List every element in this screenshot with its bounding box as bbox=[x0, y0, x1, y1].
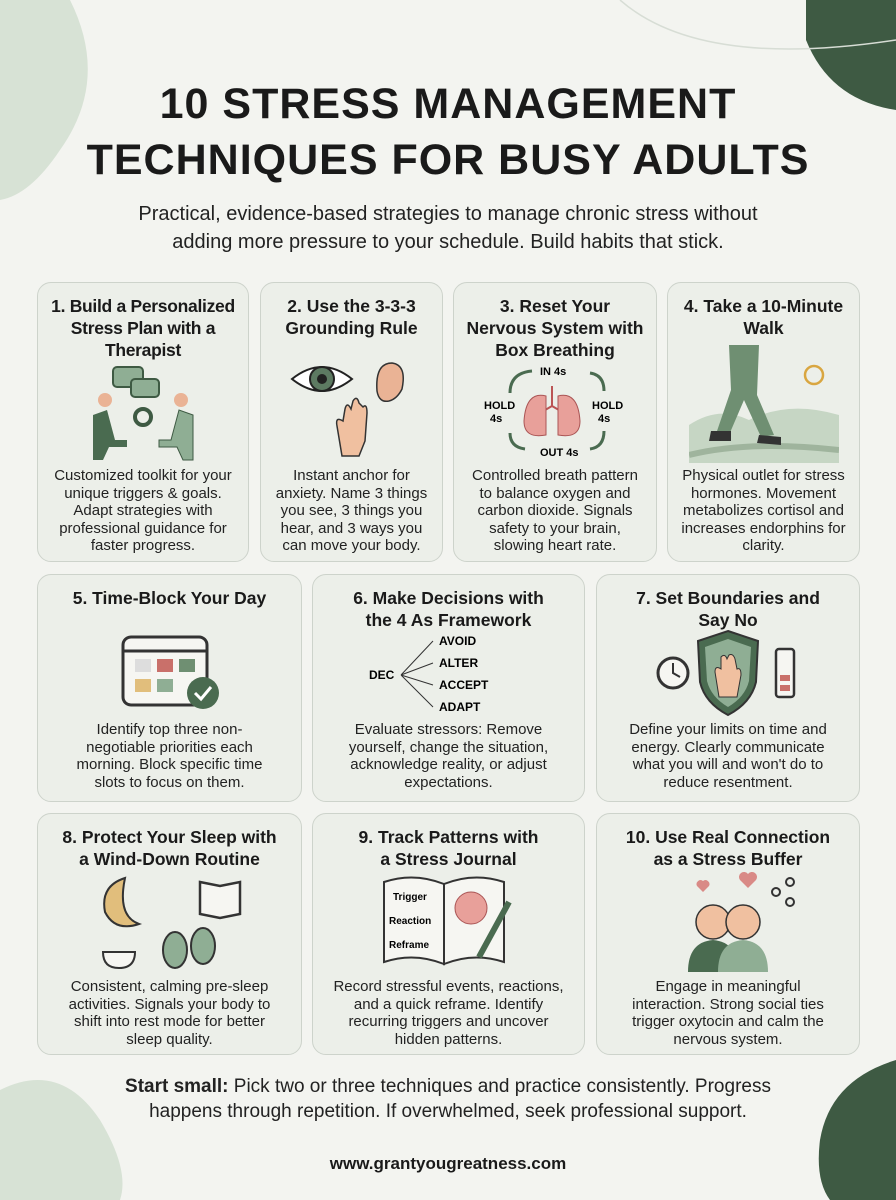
card 5 bbox=[37, 574, 302, 802]
subtitle: adding more pressure to your schedule. Build habits that stick. bbox=[172, 231, 724, 253]
card 3 bbox=[453, 282, 657, 562]
card 6 bbox=[312, 574, 585, 802]
icon: therapy bbox=[93, 366, 194, 460]
card 2: 2. Use the 3-3-3 Grounding Rule bbox=[285, 296, 418, 338]
card 9: 9. Track Patterns with a Stress Journal bbox=[359, 827, 538, 869]
icon: decision tree bbox=[368, 634, 489, 714]
subtitle: Practical, evidence-based strategies to manage chronic stress without bbox=[138, 203, 758, 225]
icon: calendar bbox=[122, 636, 219, 709]
card 4: Physical outlet for stress hormones. Movement metabolizes cortisol and increases endorphins for clarity. bbox=[681, 467, 846, 554]
footer note: Start small: Pick two or three techniques and practice consistently. Progress bbox=[125, 1076, 771, 1097]
url: www.grantyougreatness.com bbox=[330, 1154, 566, 1173]
card 9: Record stressful events, reactions, and a quick reframe. Identify recurring triggers and uncover hidden patterns. bbox=[333, 978, 564, 1048]
card 3: 3. Reset Your Nervous System with Box Breathing bbox=[466, 296, 644, 360]
icon: lungs box breathing: 4s bbox=[598, 413, 610, 425]
icon: decision tree: AVOID bbox=[438, 634, 476, 648]
card 3: Controlled breath pattern to balance oxygen and carbon dioxide. Signals safety to your brain, slowing heart rate. bbox=[472, 467, 638, 554]
icon: journal bbox=[383, 876, 512, 966]
card 7 bbox=[596, 574, 860, 802]
icon: shield hand bbox=[656, 630, 796, 716]
card 8: 8. Protect Your Sleep with a Wind-Down Routine bbox=[62, 827, 277, 869]
icon: decision tree: ADAPT bbox=[438, 700, 481, 714]
icon: connection bbox=[688, 872, 795, 972]
icon: journal: Reframe bbox=[388, 940, 429, 951]
icon: lungs box breathing: OUT 4s bbox=[540, 447, 579, 459]
card 2 bbox=[260, 282, 443, 562]
icon: decision tree: DEC bbox=[368, 668, 394, 682]
icon: lungs box breathing: IN 4s bbox=[540, 366, 566, 378]
card 4: 4. Take a 10-Minute Walk bbox=[684, 296, 843, 338]
card 10: Engage in meaningful interaction. Strong social ties trigger oxytocin and calm the nervous system. bbox=[632, 978, 824, 1048]
subtitle bbox=[138, 203, 758, 253]
card 6: Evaluate stressors: Remove yourself, change the situation, acknowledge reality, or adjust expectations. bbox=[349, 721, 548, 790]
title bbox=[87, 80, 809, 184]
card 7: 7. Set Boundaries and Say No bbox=[636, 588, 820, 630]
icon: lungs box breathing: HOLD bbox=[484, 400, 515, 412]
card 1 bbox=[37, 282, 249, 562]
icon: sleep bbox=[102, 876, 242, 969]
card 2: Instant anchor for anxiety. Name 3 things you see, 3 things you hear, and 3 ways you can move your body. bbox=[276, 467, 427, 554]
card 6: 6. Make Decisions with the 4 As Framework bbox=[353, 588, 544, 630]
card 1: 1. Build a Personalized Stress Plan with a Therapist bbox=[51, 296, 235, 360]
card 9 bbox=[312, 813, 585, 1055]
card 5: 5. Time-Block Your Day bbox=[73, 588, 266, 608]
card 7: Define your limits on time and energy. Clearly communicate what you will and won't do to reduce resentment. bbox=[629, 721, 827, 790]
card 4 bbox=[667, 282, 860, 562]
icon: lungs box breathing: 4s bbox=[490, 413, 502, 425]
footer note: happens through repetition. If overwhelmed, seek professional support. bbox=[149, 1101, 747, 1122]
icon: decision tree: ALTER bbox=[438, 656, 478, 670]
card 1: Customized toolkit for your unique triggers & goals. Adapt strategies with professional guidance for faster progress. bbox=[54, 467, 232, 554]
icon: eye ear hand bbox=[290, 362, 404, 457]
card 10 bbox=[596, 813, 860, 1055]
title: 10 STRESS MANAGEMENT bbox=[160, 80, 736, 128]
icon: lungs box breathing: HOLD bbox=[592, 400, 623, 412]
icon: journal: Reaction bbox=[388, 916, 431, 927]
card 8: Consistent, calming pre-sleep activities. Signals your body to shift into rest mode for better sleep quality. bbox=[69, 978, 270, 1048]
card 10: 10. Use Real Connection as a Stress Buffer bbox=[626, 827, 830, 869]
icon: lungs box breathing bbox=[484, 366, 623, 459]
footer note bbox=[125, 1076, 771, 1122]
title: TECHNIQUES FOR BUSY ADULTS bbox=[87, 136, 809, 184]
icon: walk scene bbox=[689, 345, 839, 463]
card 5: Identify top three non-negotiable priorities each morning. Block specific time slots to focus on them. bbox=[77, 721, 262, 790]
icon: journal: Trigger bbox=[392, 892, 427, 903]
card 8 bbox=[37, 813, 302, 1055]
icon: decision tree: ACCEPT bbox=[438, 678, 489, 692]
